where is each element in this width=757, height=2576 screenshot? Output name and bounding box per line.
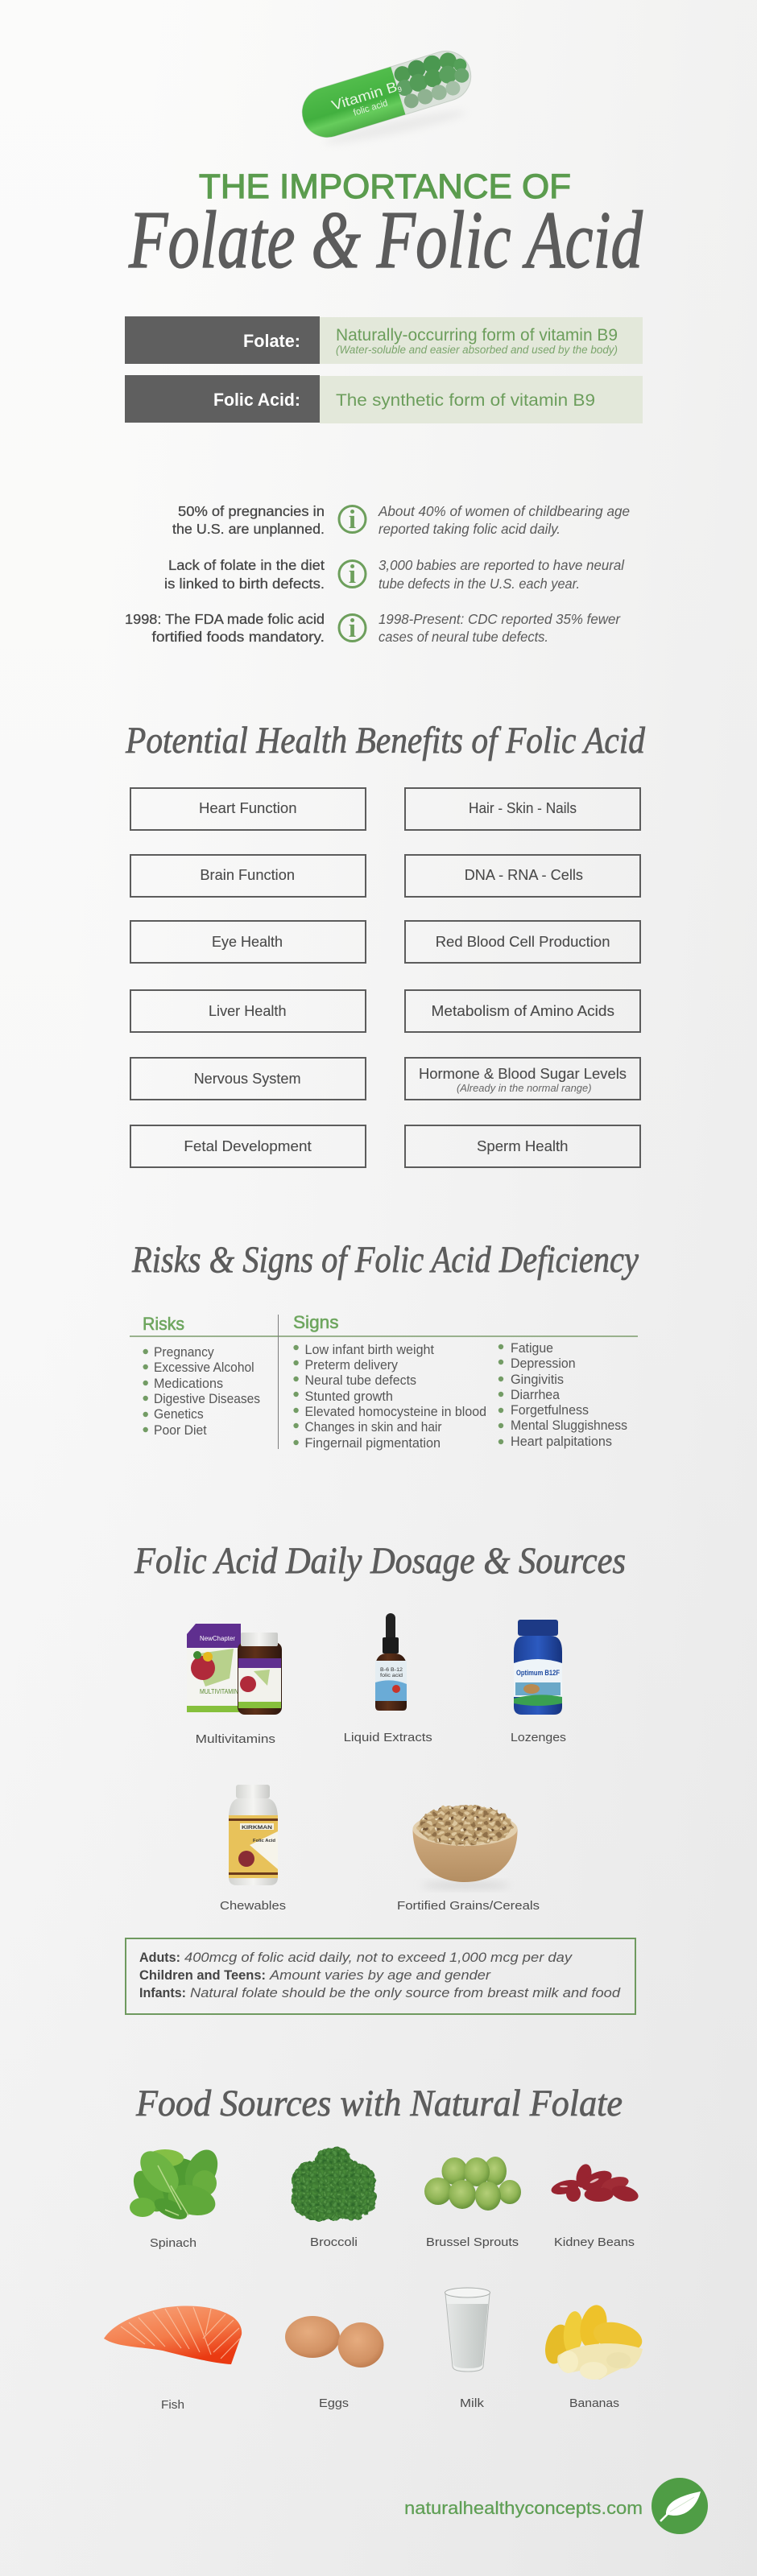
callout: dosage by age: Children and Teens: [139, 1967, 266, 1983]
risks column: Risks [143, 1314, 184, 1334]
benefit: nervous system [130, 1058, 366, 1100]
website url: naturalhealthyconcepts.com [404, 2498, 643, 2518]
food: milk [445, 2288, 490, 2410]
heading: risks and signs: Risks & Signs of Folic Acid Deficiency [131, 1239, 639, 1281]
panel: benefits grid [130, 788, 640, 1167]
signs column 2: Fatigue [511, 1341, 553, 1356]
panel: fact row 1: About 40% of women of childbearing age [378, 503, 630, 519]
icon: kidney beans [550, 2162, 640, 2204]
risks column: Medications [154, 1377, 223, 1391]
panel: fact row 2: tube defects in the U.S. each year. [378, 576, 580, 592]
panel: fact row 1: i [349, 506, 356, 535]
icon: leaf logo [652, 2478, 708, 2534]
benefit: hormone and blood sugar levels [405, 1058, 640, 1100]
source: fortified grains and cereals [397, 1805, 540, 1913]
food: spinach [127, 2144, 224, 2250]
benefit: dna rna cells [405, 855, 640, 897]
panel: fact row 2: i [349, 560, 356, 589]
benefit: red blood cell production [405, 921, 640, 963]
benefit: fetal development: Fetal Development [184, 1137, 312, 1154]
panel: fact row 3: 1998-Present: CDC reported 35% fewer [378, 611, 621, 627]
benefit: heart function [130, 788, 366, 830]
icon: two eggs [285, 2316, 383, 2368]
signs column 1: Low infant birth weight [304, 1343, 434, 1357]
label: lozenges: Lozenges [511, 1732, 566, 1744]
benefit: liver health: Liver Health [209, 1002, 287, 1019]
panel: fact row 3: i [349, 614, 356, 643]
food: bananas [541, 2302, 645, 2410]
benefit: brain function [130, 855, 366, 897]
food: fish [104, 2306, 242, 2412]
callout: dosage by age [126, 1938, 635, 2014]
benefit: eye health [130, 921, 366, 963]
callout: dosage by age: Infants: [139, 1985, 186, 2000]
benefit: hair skin nails: Hair - Skin - Nails [469, 799, 577, 816]
source: multivitamins [187, 1624, 282, 1746]
panel: fact row 3 [125, 611, 621, 645]
signs column 1: Fingernail pigmentation [304, 1436, 441, 1451]
label: kidney beans: Kidney Beans [554, 2236, 635, 2249]
label: chewables: Chewables [220, 1900, 286, 1913]
label: spinach: Spinach [150, 2237, 196, 2250]
panel: fact row 2: Lack of folate in the diet [168, 557, 325, 573]
signs column 2: Forgetfulness [511, 1403, 589, 1418]
callout: dosage by age: Natural folate should be the only source from breast milk and food [190, 1985, 621, 2000]
risks column [143, 1314, 260, 1438]
panel: folate definition [125, 316, 643, 364]
panel: folate definition: (Water-soluble and easier absorbed and used by the body) [336, 344, 618, 356]
callout: dosage by age: Amount varies by age and gender [269, 1967, 491, 1983]
callout: dosage by age: Aduts: [139, 1950, 180, 1965]
risks column: Excessive Alcohol [154, 1360, 254, 1375]
icon: chewable tablets bottle [229, 1785, 278, 1885]
source: lozenges [511, 1620, 566, 1744]
label: milk: Milk [460, 2397, 485, 2410]
benefit: hormone and blood sugar levels: Hormone & Blood Sugar Levels [419, 1065, 627, 1082]
signs column 2 [498, 1341, 627, 1449]
panel: fact row 3: cases of neural tube defects. [378, 629, 548, 645]
panel: folate definition: Naturally-occurring form of vitamin B9 [336, 326, 618, 345]
icon: dropper bottle: folic acid [380, 1674, 403, 1678]
icon: vitamin B9 capsule [296, 45, 477, 149]
benefit: eye health: Eye Health [212, 933, 283, 950]
signs column 2: Mental Sluggishness [511, 1418, 627, 1433]
panel: folic acid definition: The synthetic form of vitamin B9 [336, 391, 595, 410]
food: eggs [285, 2316, 383, 2410]
signs column 2: Depression [511, 1356, 576, 1371]
source: liquid extracts [344, 1613, 432, 1744]
signs column 2: Heart palpitations [511, 1435, 612, 1449]
callout: dosage by age: 400mcg of folic acid daily, not to exceed 1,000 mcg per day [184, 1950, 573, 1965]
icon: blue bottle [514, 1620, 562, 1715]
signs column 1: Stunted growth [304, 1389, 393, 1404]
label: multivitamins: Multivitamins [196, 1733, 275, 1746]
benefit: metabolism of amino acids: Metabolism of Amino Acids [432, 1002, 614, 1019]
icon: dropper bottle [375, 1613, 407, 1711]
signs column 1: Neural tube defects [304, 1373, 416, 1388]
signs column 2: Diarrhea [511, 1388, 561, 1402]
benefit: hair skin nails [405, 788, 640, 830]
icon: bananas [541, 2302, 645, 2380]
icon: glass of milk [445, 2288, 490, 2372]
signs column 2: Gingivitis [511, 1373, 564, 1387]
icon: chewable tablets bottle: Folic Acid [253, 1839, 275, 1843]
label: bananas: Bananas [569, 2397, 619, 2410]
signs column 1: Signs [293, 1312, 338, 1332]
icon: wooden bowl of cereal [412, 1805, 518, 1889]
risks column: Digestive Diseases [154, 1392, 260, 1406]
icon: chewable tablets bottle: KIRKMAN [242, 1825, 272, 1831]
icon: multivitamin box and bottle: NewChapter [200, 1635, 235, 1642]
risks column: Pregnancy [154, 1345, 214, 1360]
label: broccoli: Broccoli [310, 2236, 358, 2249]
panel: risks and signs table [130, 1312, 638, 1451]
signs column 1: Changes in skin and hair [304, 1420, 442, 1435]
benefit: brain function: Brain Function [200, 866, 295, 883]
benefit: liver health [130, 990, 366, 1032]
heading: food sources: Food Sources with Natural Folate [135, 2083, 623, 2124]
benefit: fetal development [130, 1125, 366, 1167]
icon: broccoli [292, 2147, 376, 2220]
footer: website and logo [404, 2478, 708, 2534]
label: fish: Fish [161, 2399, 184, 2412]
benefit: sperm health: Sperm Health [477, 1137, 569, 1154]
icon: multivitamin box and bottle [187, 1624, 282, 1715]
label: brussel sprouts: Brussel Sprouts [426, 2236, 519, 2249]
benefit: dna rna cells: DNA - RNA - Cells [465, 866, 583, 883]
source: chewables [220, 1785, 286, 1913]
heading: potential health benefits: Potential Health Benefits of Folic Acid [125, 720, 645, 762]
panel: fact row 1 [172, 503, 630, 537]
heading: daily dosage and sources: Folic Acid Daily Dosage & Sources [134, 1540, 626, 1582]
icon: brussel sprouts [424, 2157, 521, 2211]
signs column 1 [293, 1312, 486, 1451]
food: kidney beans [550, 2162, 640, 2249]
benefit: heart function: Heart Function [199, 799, 296, 816]
panel: fact row 3: fortified foods mandatory. [151, 629, 325, 645]
food: broccoli [292, 2147, 376, 2249]
title [128, 167, 643, 286]
signs column 1: Elevated homocysteine in blood [304, 1405, 486, 1419]
icon: vitamin B9 capsule: Vitamin B [329, 78, 399, 114]
benefit: sperm health [405, 1125, 640, 1167]
label: fortified grains: Fortified Grains/Cereals [397, 1900, 540, 1913]
benefit: metabolism of amino acids [405, 990, 640, 1032]
label: eggs: Eggs [319, 2397, 349, 2410]
panel: folic acid definition: Folic Acid: [213, 390, 300, 410]
panel: fact row 1: the U.S. are unplanned. [172, 521, 325, 537]
title line: the importance of: THE IMPORTANCE OF [199, 167, 571, 206]
benefit: red blood cell production: Red Blood Cell Production [436, 933, 610, 950]
icon: salmon fillet [104, 2306, 242, 2364]
icon: multivitamin box and bottle: MULTIVITAMIN [200, 1688, 238, 1695]
panel: folic acid definition [125, 375, 643, 423]
panel: folate definition: Folate: [243, 331, 300, 351]
risks column: Genetics [154, 1407, 204, 1422]
food: brussel sprouts [424, 2157, 521, 2249]
panel: fact row 1: reported taking folic acid daily. [378, 521, 561, 537]
risks column: Poor Diet [154, 1423, 207, 1438]
icon: spinach leaves [127, 2144, 224, 2223]
panel: fact row 2: 3,000 babies are reported to have neural [378, 557, 625, 573]
icon: blue bottle: Optimum B12F [516, 1669, 560, 1677]
panel: fact row 3: 1998: The FDA made folic acid [125, 611, 325, 627]
panel: fact row 1: 50% of pregnancies in [178, 503, 325, 519]
icon: vitamin B9 capsule: 9 [397, 85, 403, 93]
benefit: nervous system: Nervous System [194, 1070, 301, 1087]
panel: fact row 2 [164, 557, 625, 592]
icon: dropper bottle: B-6 B-12 [380, 1668, 403, 1673]
signs column 1: Preterm delivery [304, 1358, 399, 1373]
icon: vitamin B9 capsule: folic acid [352, 98, 389, 118]
panel: fact row 2: is linked to birth defects. [164, 576, 325, 592]
benefit: hormone and blood sugar levels: (Already in the normal range) [457, 1082, 591, 1094]
label: liquid extracts: Liquid Extracts [344, 1732, 432, 1744]
